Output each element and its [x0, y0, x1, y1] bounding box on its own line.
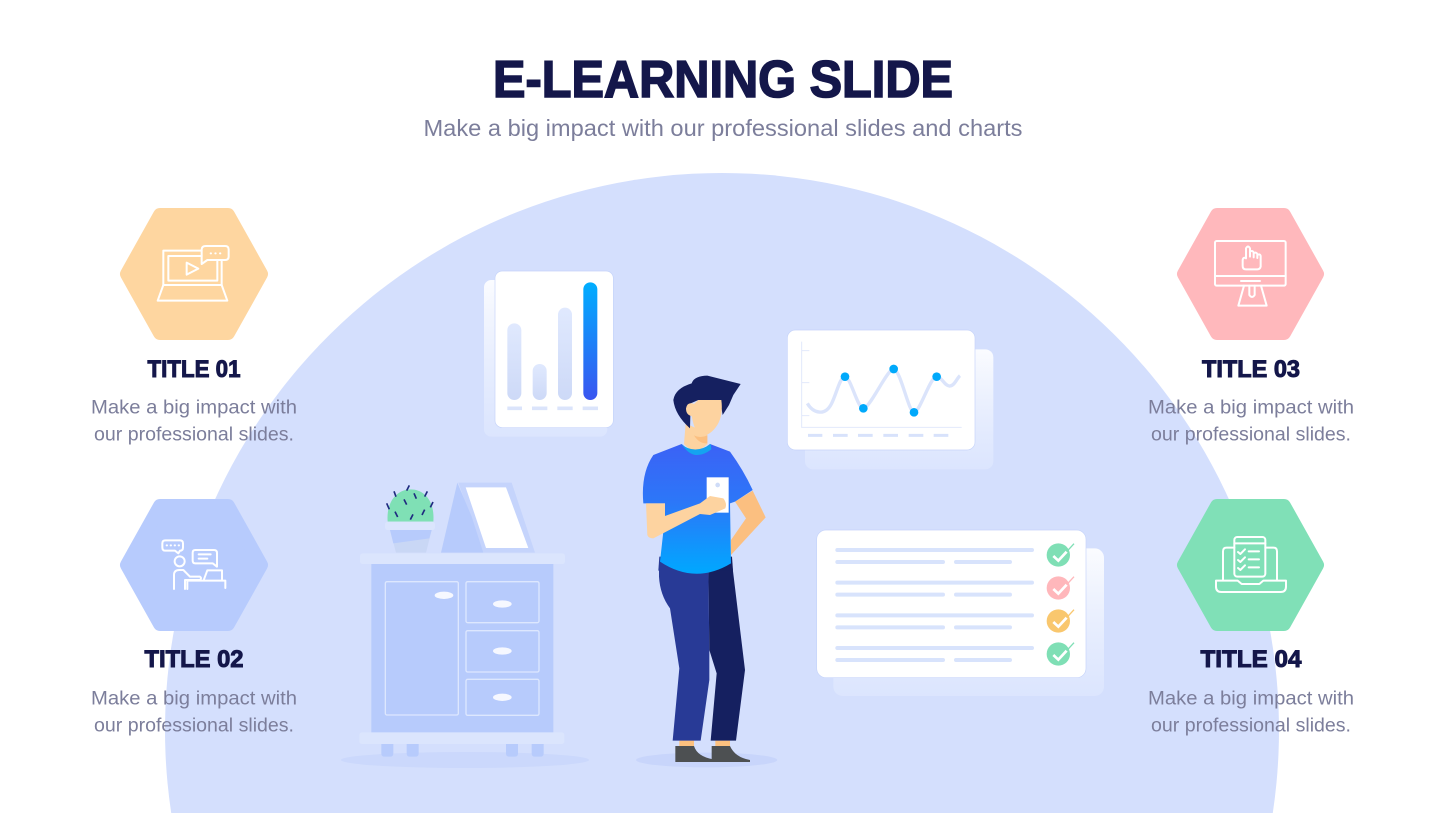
text: description 03: our professional slides. — [1151, 424, 1351, 446]
icon: laptop with video — [158, 246, 229, 301]
text: description 03: Make a big impact with — [1148, 398, 1354, 418]
heading: title 03: TITLE 03 — [1202, 356, 1300, 383]
heading: title 01: TITLE 01 — [148, 356, 240, 383]
checklist card — [817, 530, 1104, 696]
background semicircle — [165, 173, 1279, 813]
panel: title 04 — [1148, 506, 1354, 736]
panel: title 03 — [1148, 215, 1354, 446]
text: description 02: our professional slides. — [94, 716, 294, 736]
bar chart card — [484, 271, 613, 437]
hexagon: blue — [127, 506, 261, 624]
text: description 01: Make a big impact with — [91, 398, 297, 418]
line chart card — [787, 330, 993, 469]
icon: touch monitor — [1215, 241, 1286, 306]
title: E-LEARNING SLIDE — [493, 51, 953, 109]
person torso and head — [643, 376, 766, 574]
heading: title 02: TITLE 02 — [144, 646, 244, 673]
text: description 01: our professional slides. — [94, 424, 294, 446]
panel: title 01 — [91, 215, 297, 446]
text: description 04: Make a big impact with — [1148, 688, 1354, 710]
hexagon: pink — [1184, 215, 1317, 333]
subtitle: Make a big impact with our professional slides and charts — [424, 115, 1023, 141]
heading: title 04: TITLE 04 — [1200, 646, 1302, 673]
person legs — [636, 568, 777, 767]
icon: tutor at desk — [162, 540, 225, 589]
person figure — [636, 376, 777, 767]
text: description 04: our professional slides. — [1151, 716, 1351, 736]
text: description 02: Make a big impact with — [91, 688, 297, 710]
icon: laptop with checklist — [1216, 537, 1286, 592]
hexagon: orange — [127, 215, 261, 333]
hexagon: green — [1184, 506, 1317, 624]
panel: title 02 — [91, 506, 297, 736]
cabinet with plant and frame — [341, 483, 589, 768]
